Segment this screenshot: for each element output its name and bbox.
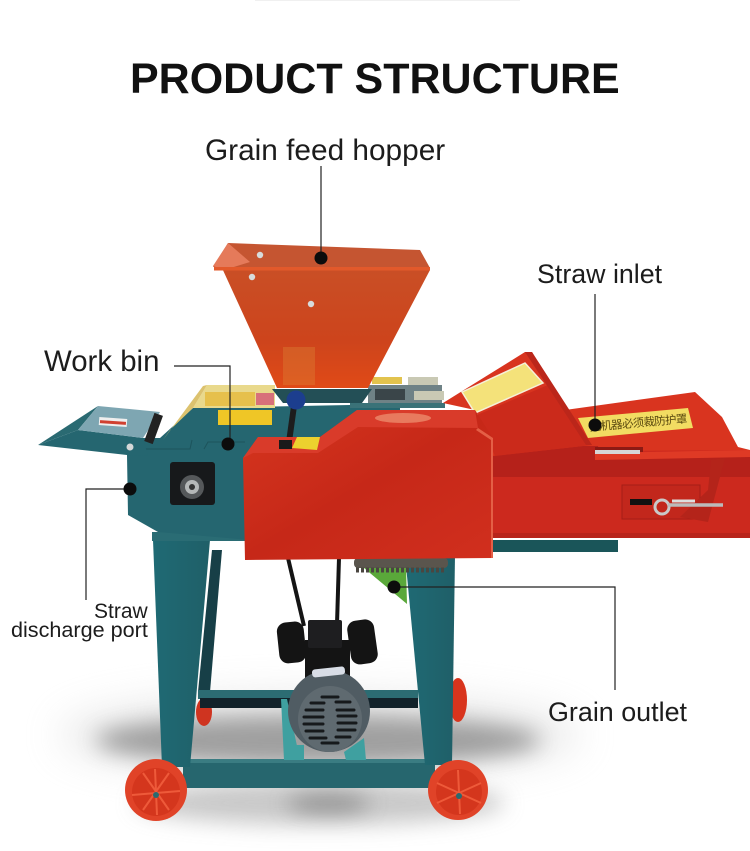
terminal box (308, 620, 342, 648)
cover yellow sticker (292, 437, 320, 450)
work bin body (127, 404, 400, 540)
discharge chute (38, 406, 163, 456)
motor vents (304, 697, 356, 743)
handle slot (279, 440, 292, 449)
chute warning sticker (99, 417, 127, 427)
mouth cover yellow label (462, 363, 543, 413)
work bin warning sticker (218, 410, 272, 425)
chute bolt (126, 444, 134, 450)
inner back leg (198, 550, 222, 692)
belts (288, 558, 339, 626)
right wheel (428, 760, 488, 820)
hopper bolts (249, 252, 314, 307)
adjuster plate (622, 458, 725, 522)
machine illustration (38, 243, 750, 821)
trough front (493, 450, 750, 538)
cover top band (243, 410, 478, 458)
lower teal rail (152, 532, 252, 541)
callout: grain outlet (388, 580, 688, 727)
motor body (288, 670, 370, 752)
red drive cover (243, 410, 493, 560)
left wheel (125, 759, 187, 821)
callout: grain feed hopper: Grain feed hopper (205, 134, 445, 167)
front wheels (125, 759, 488, 821)
top control plate (350, 377, 445, 408)
angled mouth cover (443, 352, 592, 456)
trough lower lip (493, 533, 750, 538)
callout: work bin: Work bin (44, 345, 159, 378)
callout: work bin (44, 345, 234, 450)
right teal rail (490, 540, 618, 552)
chute hinge (144, 413, 163, 444)
left leg (153, 540, 210, 767)
capacitors (276, 618, 379, 680)
handle (286, 390, 306, 442)
bearing block (170, 462, 215, 505)
motor badge (312, 666, 345, 678)
work bin seam lines (143, 440, 245, 449)
tray warning label (578, 408, 693, 438)
motor (276, 618, 379, 760)
callout: grain feed hopper (205, 134, 445, 264)
hopper (213, 243, 430, 403)
callout: straw inlet: Straw inlet (537, 259, 663, 289)
callout: straw inlet (537, 259, 663, 432)
right leg (405, 555, 455, 765)
right feed tray (493, 392, 750, 538)
faint cropped text line at top (255, 0, 520, 1)
gear and green guard (354, 558, 448, 604)
tray warning label: 此机器必须裁防护罩 (589, 412, 688, 434)
bottom frame bar (183, 759, 435, 788)
cover faded oval logo (375, 413, 431, 423)
motor mount (281, 699, 366, 760)
back wheels (196, 678, 467, 726)
title: PRODUCT STRUCTURE (130, 55, 620, 103)
hopper faded sticker (283, 347, 315, 385)
cover right edge (476, 428, 493, 558)
middle frame bar (198, 690, 418, 708)
ground shadow (60, 695, 580, 825)
callout: straw discharge port: Straw (94, 600, 149, 623)
callout: straw discharge port: discharge port (11, 617, 148, 642)
callout: straw discharge port (11, 482, 149, 642)
hopper lower flange (272, 389, 372, 403)
callout: grain outlet: Grain outlet (548, 697, 688, 727)
work bin top plate (163, 385, 275, 440)
